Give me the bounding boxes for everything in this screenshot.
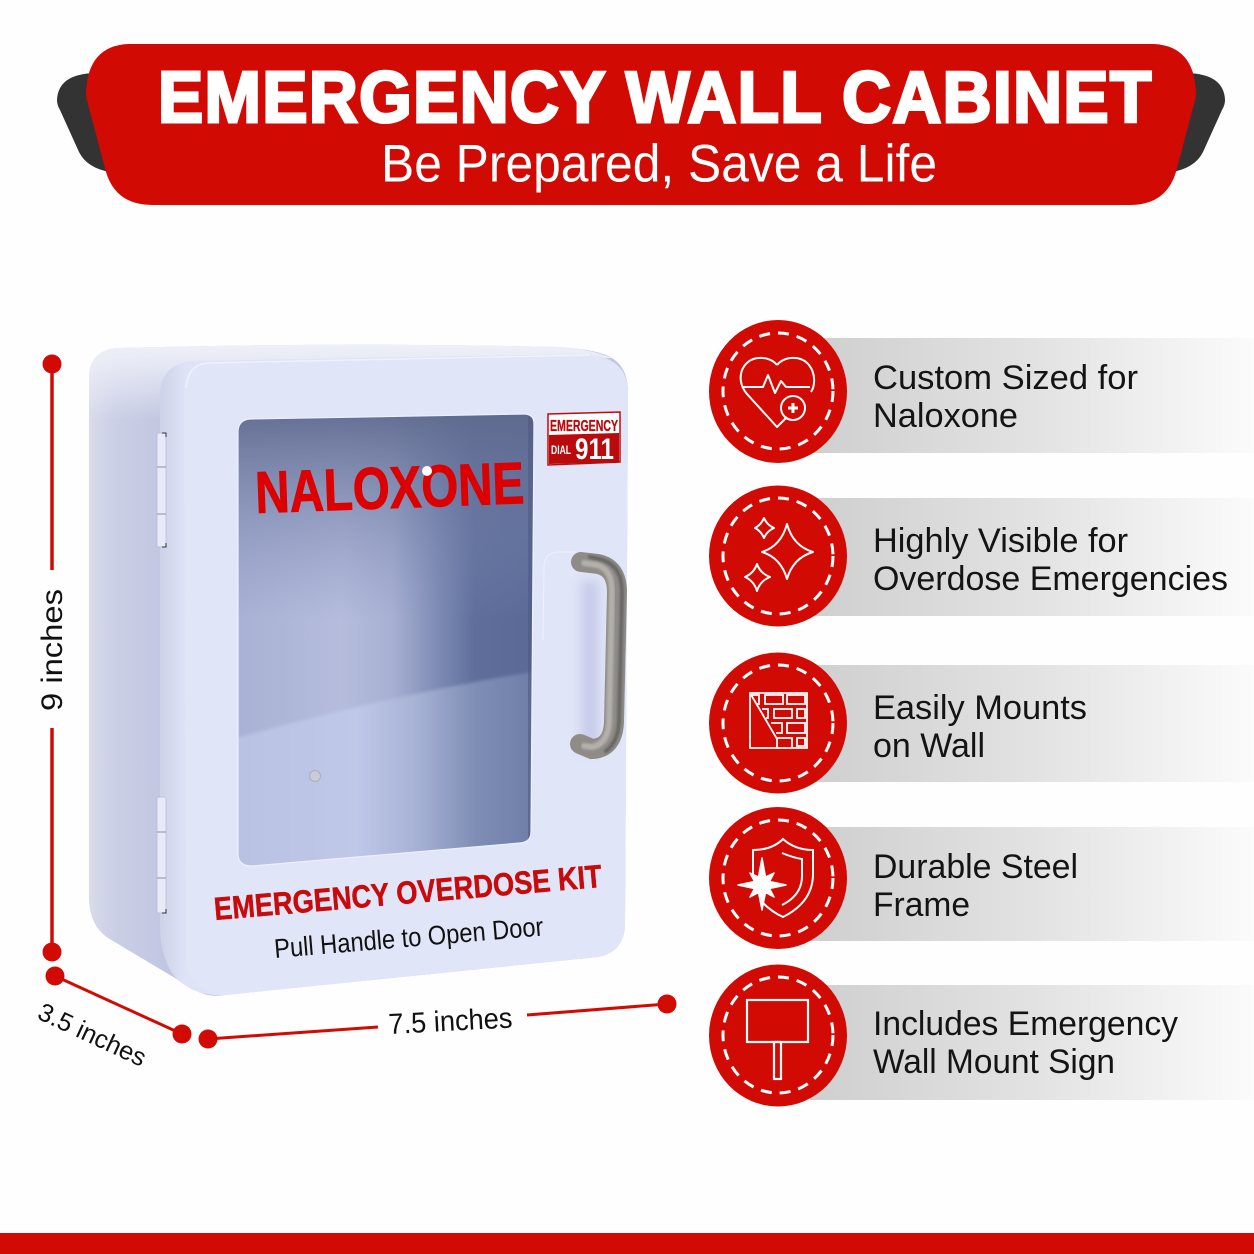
feature: custom sized (709, 320, 1254, 463)
window (238, 414, 534, 866)
icon: shield with burst (738, 839, 813, 917)
dimension: height (36, 354, 69, 962)
feature band (810, 665, 1254, 782)
feature band (810, 498, 1254, 616)
banner right ribbon tab (1172, 73, 1225, 172)
title: EMERGENCY WALL CABINET (158, 57, 1153, 137)
emergency overdose kit label: EMERGENCY OVERDOSE KIT (213, 858, 604, 927)
door bevel (160, 354, 628, 995)
handle shadow (582, 580, 598, 750)
feature text: Frame (873, 886, 970, 924)
dashed ring (723, 333, 833, 449)
feature text: Wall Mount Sign (873, 1043, 1115, 1081)
icon: sparkles (745, 518, 813, 591)
emergency 911 sticker: DIAL (551, 443, 571, 457)
feature text: on Wall (873, 727, 985, 765)
feature text: Naloxone (873, 397, 1018, 435)
feature text: Custom Sized for (873, 359, 1138, 397)
icon: sign on post (747, 1000, 808, 1079)
feature: easily mounts (709, 652, 1254, 794)
upper hinge (157, 433, 166, 547)
cabinet top face (89, 345, 612, 420)
badge circle (709, 964, 847, 1106)
banner left ribbon tab (57, 73, 110, 172)
door handle (580, 557, 622, 751)
feature text: Overdose Emergencies (873, 560, 1228, 598)
feature band (810, 827, 1254, 941)
NALOXONE label: NALOXONE (254, 450, 525, 526)
badge circle (709, 320, 847, 463)
door front (184, 354, 628, 995)
emergency 911 sticker (548, 412, 620, 466)
icon: brick wall (750, 693, 807, 748)
icon: heart with pulse (741, 358, 814, 427)
subtitle: Be Prepared, Save a Life (381, 134, 937, 194)
feature text: Highly Visible for (873, 522, 1128, 560)
feature: wall mount sign (709, 964, 1254, 1106)
emergency 911 sticker: 911 (575, 433, 614, 466)
feature text: Easily Mounts (873, 689, 1087, 727)
dimension: depth (33, 966, 191, 1072)
lower hinge (157, 797, 166, 913)
top door highlight (186, 355, 590, 388)
dashed ring (723, 498, 833, 614)
feature band (810, 985, 1254, 1100)
dimension: depth: 3.5 inches (33, 998, 150, 1072)
cabinet body (89, 345, 628, 996)
dashed ring (723, 820, 833, 936)
window rim (238, 414, 534, 866)
feature: highly visible (709, 486, 1254, 626)
feature band (810, 338, 1254, 453)
dimension: width (198, 994, 676, 1048)
feature text: Includes Emergency (873, 1005, 1178, 1043)
white glint (422, 466, 432, 476)
banner red shape (86, 44, 1196, 205)
window peg (310, 770, 320, 782)
header banner (57, 44, 1225, 205)
dashed ring (723, 665, 833, 781)
cabinet photo (89, 345, 628, 996)
bottom red bar (0, 1233, 1254, 1254)
feature text: Durable Steel (873, 848, 1078, 886)
dimension: width: 7.5 inches (388, 1003, 513, 1041)
pull handle instruction: Pull Handle to Open Door (273, 911, 545, 964)
emergency 911 sticker: EMERGENCY (550, 418, 618, 435)
badge circle (709, 807, 847, 949)
badge circle (709, 486, 847, 626)
dashed ring (723, 977, 833, 1093)
handle recess outline (543, 552, 575, 640)
feature: durable steel (709, 807, 1254, 949)
dimension: height: 9 inches (36, 589, 69, 711)
badge circle (709, 652, 847, 794)
